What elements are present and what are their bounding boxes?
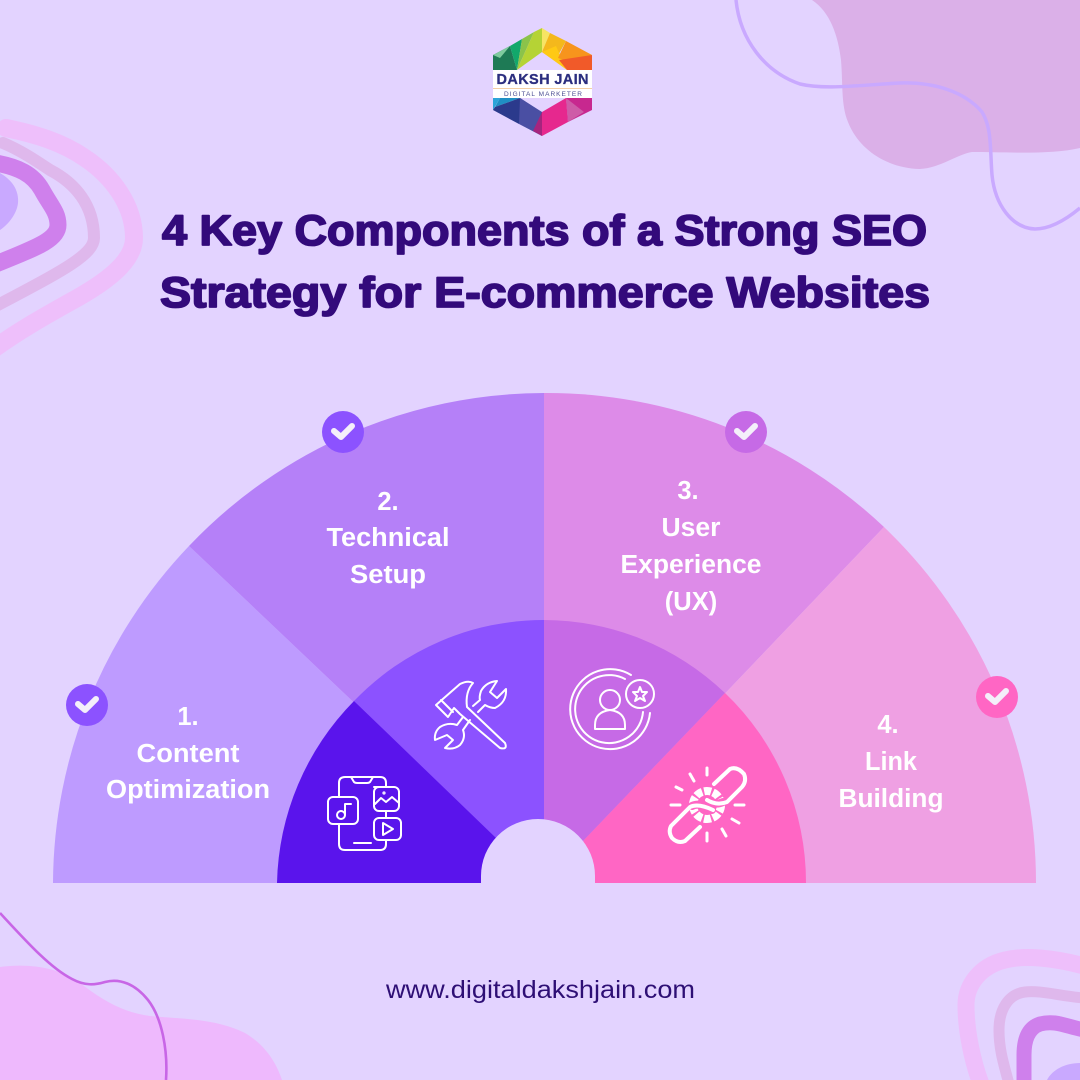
icon: check 4 <box>976 676 1018 718</box>
title: 4 Key Components of a Strong SEO <box>162 207 927 255</box>
label: 1 Content Optimization: 1. <box>177 703 199 731</box>
panel: segment 2 outer <box>189 393 544 883</box>
footer: website url: www.digitaldakshjain.com <box>385 976 695 1004</box>
decoration: top right blob and line <box>736 0 1080 229</box>
label: 3 User Experience (UX): User <box>662 514 721 542</box>
panel: segment 4 outer <box>544 527 1036 883</box>
logo: Daksh Jain hexagon badge <box>493 28 592 136</box>
label: 4 Link Building: 4. <box>877 711 899 739</box>
logo: Daksh Jain hexagon badge: DAKSH JAIN <box>496 72 588 88</box>
label: 3 User Experience (UX): Experience <box>620 551 762 579</box>
icon: broken chain link with gear <box>670 768 745 842</box>
title: Strategy for E-commerce Websites <box>160 269 930 317</box>
panel: segment 3 outer <box>544 393 884 883</box>
panel: segment 4 inner <box>570 693 806 883</box>
panel: segment 1 inner <box>277 701 520 883</box>
decoration: left concentric rings <box>0 128 134 348</box>
label: 2 Technical Setup: Technical <box>326 524 450 552</box>
panel: segment 3 inner <box>544 620 725 883</box>
label: 4 Link Building <box>838 711 944 813</box>
icon: phone with media <box>328 777 401 850</box>
label: 1 Content Optimization: Content <box>136 740 240 768</box>
decoration: bottom left blob and line <box>0 913 282 1080</box>
title <box>160 207 930 317</box>
label: 2 Technical Setup: Setup <box>350 561 426 589</box>
label: 4 Link Building: Building <box>838 785 944 813</box>
icon: user with star <box>570 669 654 749</box>
label: 1 Content Optimization <box>106 703 270 804</box>
label: 3 User Experience (UX) <box>620 477 762 616</box>
icon: hammer and wrench <box>435 681 506 749</box>
center hole <box>481 819 595 884</box>
logo: Daksh Jain hexagon badge: DIGITAL MARKETER <box>504 91 582 98</box>
icon: check 1 <box>66 684 108 726</box>
label: 2 Technical Setup: 2. <box>377 488 399 516</box>
icon: check 2 <box>322 411 364 453</box>
semicircle diagram <box>53 393 1036 884</box>
label: 2 Technical Setup <box>326 488 450 589</box>
icon: check 3 <box>725 411 767 453</box>
label: 3 User Experience (UX): 3. <box>677 477 699 505</box>
decoration: bottom right concentric rings <box>966 958 1080 1080</box>
label: 3 User Experience (UX): (UX) <box>665 588 717 616</box>
label: 4 Link Building: Link <box>865 748 918 776</box>
panel: segment 1 outer <box>53 546 544 883</box>
panel: segment 2 inner <box>354 620 544 883</box>
label: 1 Content Optimization: Optimization <box>106 776 270 804</box>
